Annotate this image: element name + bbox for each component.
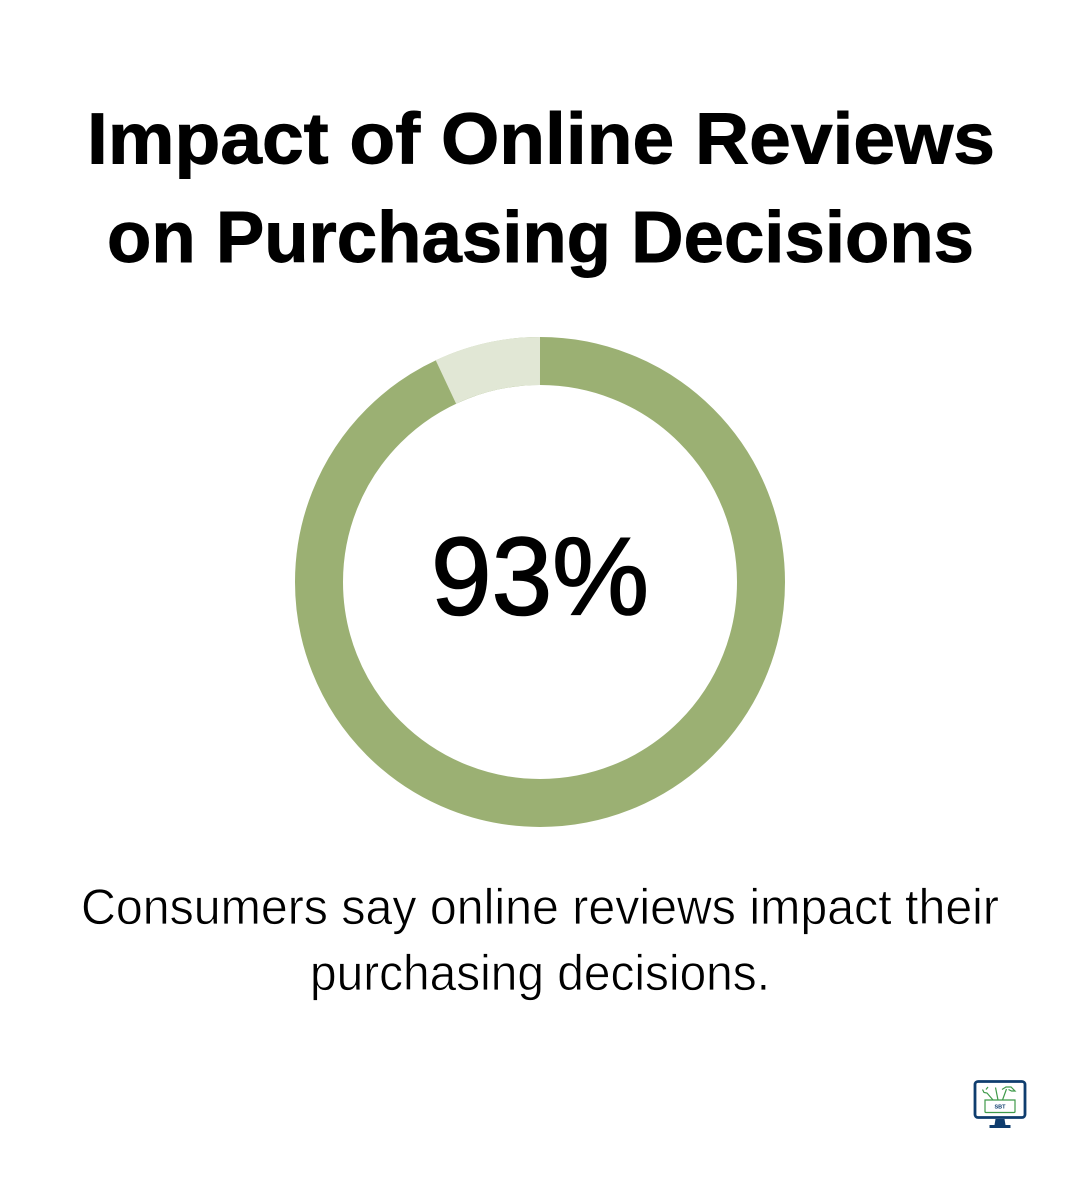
- caption: Consumers say online reviews impact their: [81, 879, 999, 935]
- title: on Purchasing Decisions: [107, 198, 974, 278]
- percentage value: 93%: [431, 516, 649, 638]
- caption: [81, 879, 999, 1001]
- title: Impact of Online Reviews: [87, 100, 995, 180]
- donut chart: 93%: [319, 361, 761, 803]
- title: [87, 100, 995, 278]
- caption: purchasing decisions.: [310, 945, 770, 1001]
- icon: SBT monitor logo: [975, 1082, 1025, 1128]
- icon: SBT monitor logo: SBT: [994, 1104, 1006, 1110]
